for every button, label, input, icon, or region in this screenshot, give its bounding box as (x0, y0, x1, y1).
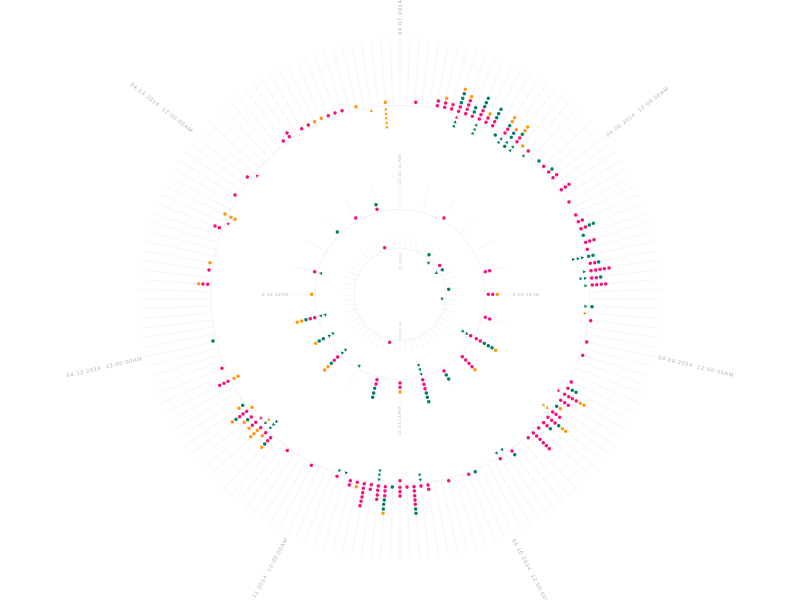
middle orange markers (296, 293, 499, 394)
outer ring date labels: 04.13.2014 12:00:00AM (129, 82, 194, 135)
outer ring arc (211, 106, 590, 484)
outer ring date labels: 04.09.2014 12:00:00AM (658, 355, 735, 379)
middle ring time labels: 12:31:11AM (397, 155, 402, 184)
outer orange markers (197, 88, 587, 515)
inner ring time labels: 45:00:00 (398, 322, 402, 339)
middle pink markers (309, 208, 494, 390)
inner pink markers (383, 246, 441, 344)
inner ring time labels (398, 253, 402, 339)
middle ring markers (296, 203, 499, 403)
outer ring ticks (99, 0, 734, 600)
outer teal markers (211, 92, 602, 515)
middle teal markers (304, 203, 494, 403)
inner ring arc (354, 248, 446, 340)
inner ring time labels: 15:00:00 (398, 253, 402, 270)
outer ring date labels: 04.08.2014 12:00:00AM (606, 86, 671, 139)
middle ring time labels: 6:03:33PM (262, 292, 289, 297)
outer pink markers (201, 99, 611, 507)
middle ring time labels (262, 155, 540, 436)
inner ring markers (383, 246, 450, 344)
inner teal markers (427, 253, 450, 301)
middle ring time labels: 12:31:11PM (397, 407, 402, 436)
middle ring arc (315, 210, 485, 380)
outer ring markers (197, 88, 611, 515)
middle ring ticks (283, 178, 517, 411)
middle ring time labels: 6:03:33AM (513, 292, 540, 297)
outer ring date labels: 04.12.2014 12:00:00AM (66, 356, 143, 379)
inner ring ticks (339, 233, 461, 356)
